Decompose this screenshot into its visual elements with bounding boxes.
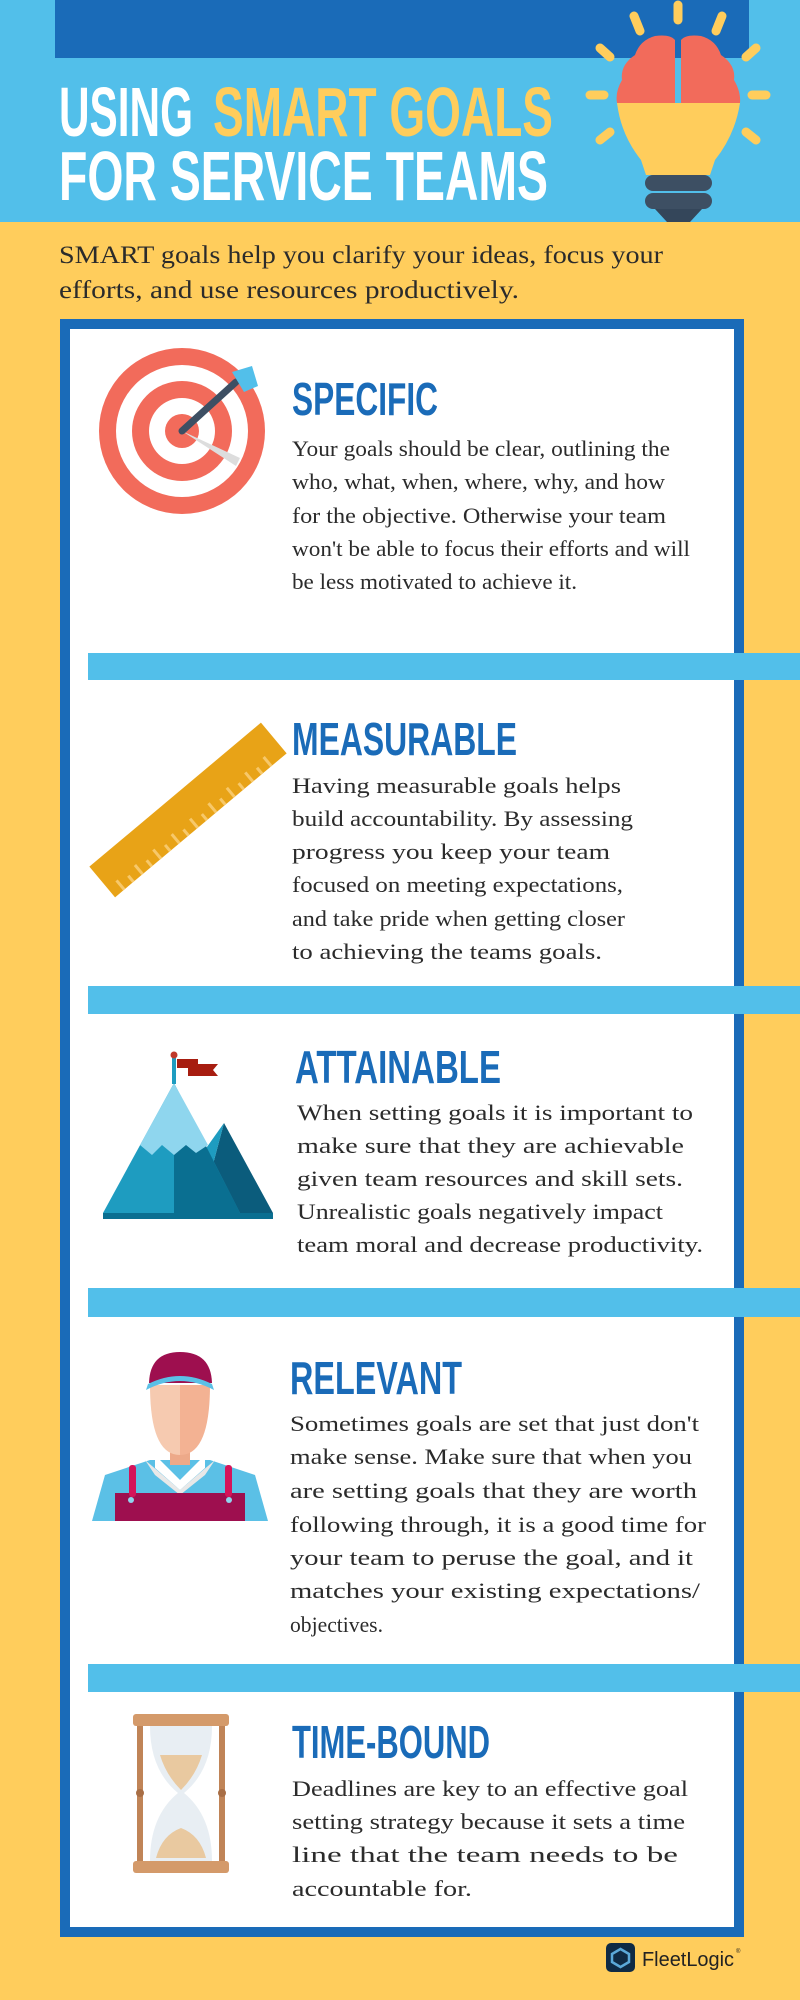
title: SMART GOALS [213,73,553,151]
text: specific: for the objective. Otherwise your team [292,503,666,528]
text: relevant: are setting goals that they are worth [290,1478,697,1503]
logo: FleetLogic [606,1943,741,1972]
text: relevant: following through, it is a good time for [290,1512,707,1537]
panel frame [60,319,744,1937]
text: measurable: to achieving the teams goals. [292,939,602,964]
text: attainable: When setting goals it is important to [297,1100,693,1125]
title [59,73,553,215]
text: measurable: focused on meeting expectations, [292,872,623,897]
text: relevant: your team to peruse the goal, and it [290,1545,693,1570]
text: attainable: team moral and decrease productivity. [297,1232,703,1257]
icon: light bulb with brain [590,5,766,222]
logo: FleetLogic: ® [736,1948,741,1955]
text: specific [292,436,690,594]
intro text: efforts, and use resources productively. [59,277,519,304]
text: relevant: make sense. Make sure that when you [290,1444,692,1469]
heading: relevant: RELEVANT [290,1352,462,1404]
title: USING [59,73,193,151]
heading: time-bound: TIME-BOUND [292,1716,490,1768]
text: time-bound: accountable for. [292,1876,472,1901]
intro text: SMART goals help you clarify your ideas, focus your [59,242,664,269]
text: measurable: progress you keep your team [292,839,610,864]
text: time-bound: line that the team needs to be [292,1842,678,1867]
icon: ruler [89,723,287,897]
heading: specific: SPECIFIC [292,373,438,425]
text: relevant: matches your existing expectations/ [290,1578,701,1603]
text: relevant [290,1411,707,1637]
text: measurable [292,773,633,964]
text: specific: Your goals should be clear, outlining the [292,436,670,461]
text: measurable: build accountability. By assessing [292,806,633,831]
text: attainable: given team resources and skill sets. [297,1166,683,1191]
title: FOR SERVICE TEAMS [59,137,548,215]
icon: hourglass [133,1714,229,1873]
text: time-bound [292,1776,688,1901]
text: time-bound: setting strategy because it sets a time [292,1809,685,1834]
heading: attainable: ATTAINABLE [295,1041,501,1093]
text: relevant: Sometimes goals are set that just don't [290,1411,699,1436]
text: specific: be less motivated to achieve it. [292,569,577,594]
header band [0,0,800,222]
text: measurable: Having measurable goals helps [292,773,621,798]
heading: measurable: MEASURABLE [292,713,517,765]
icon: worker [92,1352,268,1521]
text: time-bound: Deadlines are key to an effective goal [292,1776,688,1801]
text: attainable: make sure that they are achievable [297,1133,684,1158]
text: measurable: and take pride when getting closer [292,906,626,931]
text: specific: who, what, when, where, why, and how [292,469,665,494]
dividers [88,653,800,1692]
text: specific: won't be able to focus their efforts and will [292,536,690,561]
text: attainable: Unrealistic goals negatively impact [297,1199,663,1224]
icon: mountain [103,1052,273,1219]
text: attainable [297,1100,703,1257]
text: relevant: objectives. [290,1612,383,1637]
intro text [59,242,664,304]
icon: target [99,348,265,514]
logo: FleetLogic: FleetLogic [642,1949,734,1971]
